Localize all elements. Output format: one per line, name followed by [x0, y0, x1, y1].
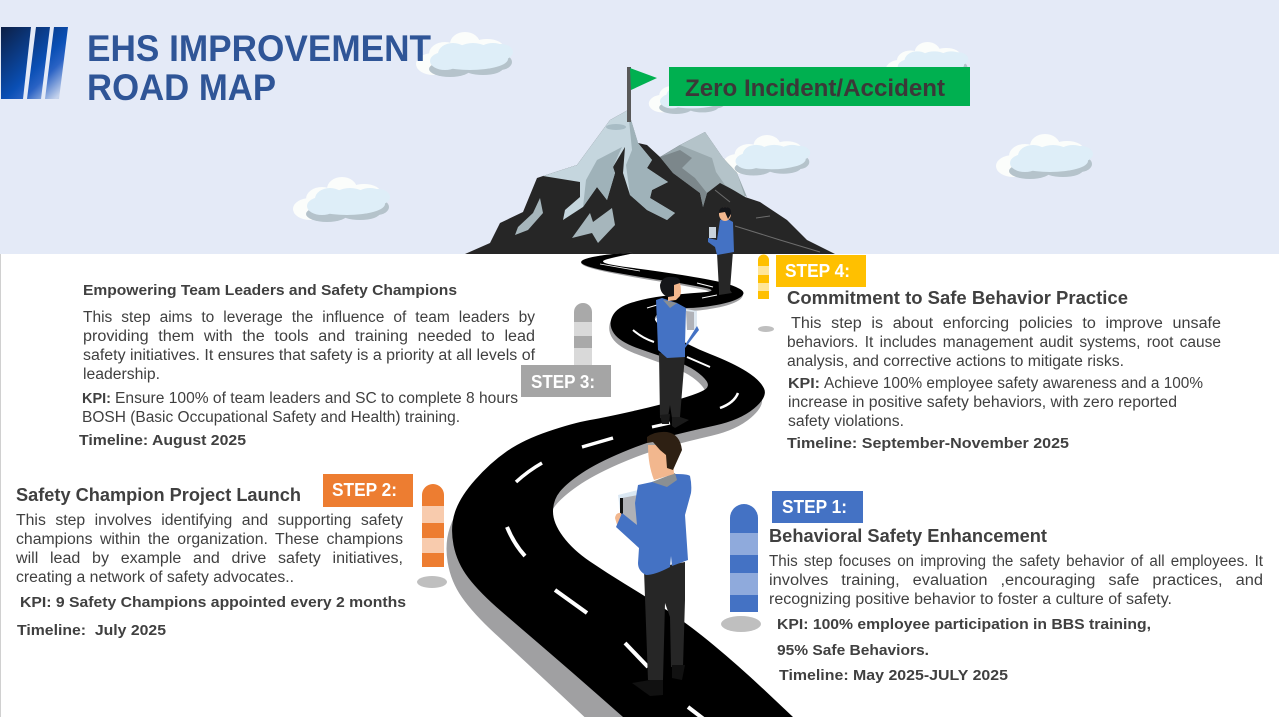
step 4 badge: STEP 4:	[785, 261, 850, 281]
step 4 heading: Commitment to Safe Behavior Practice	[787, 288, 1128, 308]
step 2 heading: Safety Champion Project Launch	[16, 485, 301, 505]
step 3 description: leadership.	[83, 366, 160, 383]
panel: step 3	[79, 282, 611, 449]
step 2 description: creating a network of safety advocates..	[16, 569, 294, 586]
pillar: step 4	[758, 254, 774, 332]
step 4 KPI: increase in positive safety behaviors, with zero reported	[788, 394, 1177, 411]
step 4 description: behaviors. It includes management audit systems, root cause	[787, 334, 1221, 351]
cloud: far right	[996, 134, 1093, 179]
pillar: step 1	[721, 504, 761, 632]
step 4 badge	[776, 255, 866, 287]
pillar: step 3	[574, 303, 592, 365]
step 2 description	[15, 512, 403, 586]
step 4 description: This step is about enforcing policies to improve unsafe	[791, 315, 1221, 332]
title: ROAD MAP	[87, 67, 276, 108]
step 3 KPI: KPI:	[82, 390, 111, 407]
step 4 KPI	[788, 375, 1203, 430]
step 4 description	[787, 315, 1221, 370]
step 1 description: recognizing positive behavior to foster a culture of safety.	[769, 591, 1172, 608]
step 2 badge: STEP 2:	[332, 480, 397, 500]
title: EHS IMPROVEMENT	[87, 28, 431, 69]
step 3 KPI	[82, 390, 518, 426]
step 1 KPI: 95% Safe Behaviors.	[777, 642, 929, 659]
step 1 KPI: KPI: 100% employee participation in BBS training,	[777, 616, 1151, 633]
step 3 badge	[521, 365, 611, 397]
goal banner	[669, 67, 970, 106]
step 3 heading: Empowering Team Leaders and Safety Champions	[83, 282, 457, 299]
step 2 description: This step involves identifying and supporting safety	[16, 512, 403, 529]
step 1 timeline: Timeline: May 2025-JULY 2025	[779, 667, 1008, 684]
road	[443, 253, 793, 717]
step 3 badge: STEP 3:	[531, 372, 595, 392]
cloud: left of mountain	[293, 177, 390, 222]
step 1 badge: STEP 1:	[782, 497, 847, 517]
step 1 heading: Behavioral Safety Enhancement	[769, 526, 1047, 546]
step 3 KPI: BOSH (Basic Occupational Safety and Health) training.	[82, 409, 460, 426]
step 3 description	[83, 309, 536, 383]
step 4 timeline: Timeline: September-November 2025	[787, 435, 1069, 452]
panel: step 2	[15, 474, 447, 639]
cloud: top right	[886, 42, 968, 80]
step 1 description	[769, 553, 1264, 608]
cloud: right of peak	[723, 135, 810, 176]
step 1 KPI	[777, 616, 1151, 659]
goal banner: Zero Incident/Accident	[685, 75, 945, 102]
figure: middle man	[656, 277, 699, 428]
step 3 description: safety initiatives. It ensures that safety is a priority at all levels of	[83, 347, 536, 364]
step 4 description: analysis, and corrective actions to mitigate risks.	[787, 353, 1124, 370]
pillar: step 2	[417, 484, 447, 588]
title	[87, 28, 431, 108]
step 4 KPI: KPI:	[788, 375, 820, 392]
step 1 badge	[772, 491, 863, 523]
step 4 KPI: safety violations.	[788, 413, 904, 430]
sky background	[0, 0, 1279, 254]
cloud: beside title	[416, 32, 513, 77]
step 3 description: providing them with the tools and training needed to lead	[83, 328, 535, 345]
cloud: behind banner	[649, 78, 726, 114]
step 2 description: will lead by example and drive safety initiatives,	[15, 550, 403, 567]
step 2 timeline: Timeline: July 2025	[17, 622, 166, 639]
step 1 description: This step focuses on improving the safety behavior of all employees. It	[769, 553, 1264, 570]
panel: step 1	[721, 491, 1264, 684]
step 2 KPI: KPI: 9 Safety Champions appointed every 2 months	[20, 594, 406, 611]
step 3 description: This step aims to leverage the influence of team leaders by	[83, 309, 535, 326]
panel: step 4	[758, 254, 1221, 452]
step 2 badge	[323, 474, 413, 507]
step 2 description: champions within the organization. These champions	[16, 531, 403, 548]
step 4 KPI: Achieve 100% employee safety awareness and a 100%	[824, 375, 1203, 392]
figure: far man	[708, 207, 734, 295]
step 1 description: involves training, evaluation ,encouraging safe practices, and	[769, 572, 1263, 589]
flag	[627, 67, 657, 122]
step 3 KPI: Ensure 100% of team leaders and SC to complete 8 hours	[115, 390, 518, 407]
step 3 timeline: Timeline: August 2025	[79, 432, 246, 449]
figure: front man	[615, 432, 691, 696]
mountain	[465, 110, 835, 254]
logo: slanted bars	[1, 27, 68, 99]
